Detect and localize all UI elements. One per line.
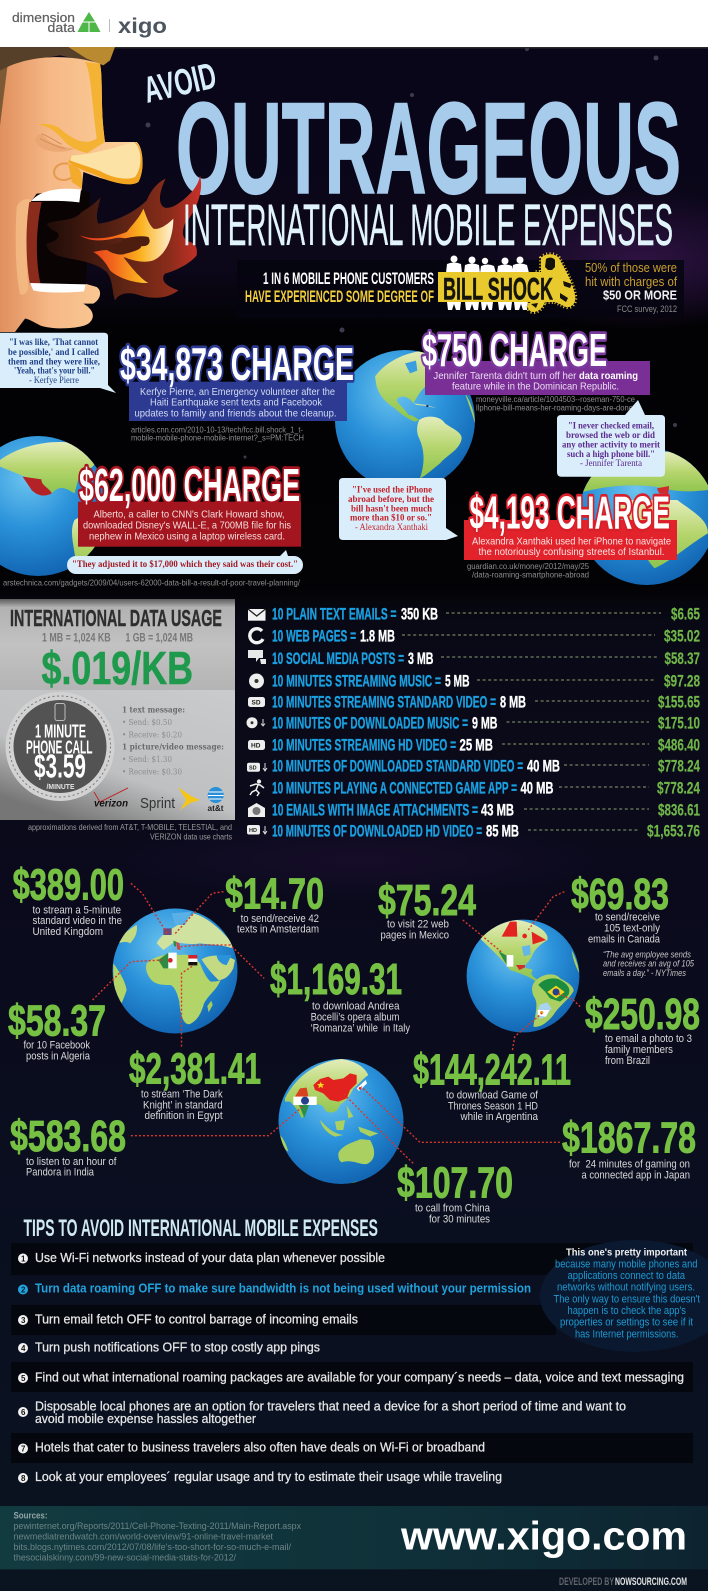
callout: this one's pretty important: applications connect to data bbox=[568, 1270, 686, 1282]
panel: bill shock statistic: HAVE EXPERIENCED SOME DEGREE OF bbox=[245, 287, 434, 306]
globe: Europe and Africa with flags bbox=[112, 908, 238, 1034]
panel: international data usage bbox=[0, 599, 235, 820]
cost: Egypt bbox=[129, 1044, 261, 1122]
cost: Argentina: to download Game of bbox=[446, 1089, 539, 1101]
cost: Canada: to send/receive bbox=[595, 912, 660, 924]
NYTimes quote: “The avg employee sends bbox=[603, 949, 691, 959]
text and picture message prices bbox=[122, 706, 224, 777]
cost: India: $583.68 bbox=[10, 1112, 126, 1161]
panel: $34,873 charge: mobile-mobile-phone-mobile-internet?_s=PM:TECH bbox=[131, 434, 304, 443]
tip 5: 5 bbox=[21, 1374, 26, 1383]
sources: newmediatrendwatch.com/world-overview/91-online-travel-market bbox=[14, 1531, 273, 1541]
panel: $62,000 charge: Alberto, a caller to CNN's Clark Howard show, bbox=[94, 508, 284, 520]
cost: India bbox=[10, 1112, 126, 1179]
approximations note: VERIZON data use charts bbox=[150, 831, 232, 841]
cost: India: Pandora in India bbox=[26, 1167, 95, 1179]
cost: Amsterdam: $14.70 bbox=[225, 869, 324, 918]
cost: China: for 30 minutes bbox=[429, 1213, 490, 1225]
phone call price badge: /MINUTE bbox=[46, 784, 75, 791]
panel: $750 charge bbox=[422, 324, 665, 477]
panel: tips bbox=[11, 1215, 693, 1484]
callout: Jennifer Tarenta quote bbox=[557, 400, 665, 477]
globe: Asia with flags bbox=[278, 1059, 404, 1189]
callout: Kerfye Pierre quote: "I was like, 'That cannot bbox=[9, 337, 99, 347]
callout: this one's pretty important bbox=[540, 1240, 708, 1352]
row: web pages bbox=[250, 627, 700, 646]
callout: this one's pretty important: happen is to check the app's bbox=[568, 1305, 686, 1317]
row: social media posts: 3 MB bbox=[408, 649, 434, 668]
carrier logos bbox=[94, 787, 224, 813]
callout: Jennifer Tarenta quote: browsed the web or did bbox=[566, 430, 655, 440]
cost: United Kingdom: United Kingdom bbox=[32, 926, 103, 938]
carrier logos: verizon bbox=[94, 799, 128, 810]
callout: Kerfye Pierre quote: 'Yeah, that's your bill." bbox=[14, 366, 95, 376]
row: downloaded HD video: HD bbox=[249, 828, 257, 834]
title lines: avoid and international mobile expenses bbox=[140, 55, 673, 258]
NYTimes quote: emails a day.” - NYTimes bbox=[603, 968, 686, 978]
row: downloaded music: 10 MINUTES OF DOWNLOADED MUSIC = bbox=[272, 713, 468, 732]
cost: United Kingdom: $389.00 bbox=[13, 860, 124, 909]
callout: Alexandra Xanthaki quote bbox=[339, 478, 458, 540]
cost: Algeria: posts in Algeria bbox=[26, 1051, 91, 1063]
cost: Amsterdam: to send/receive 42 bbox=[241, 913, 319, 925]
text and picture message prices: • Send: $1.30 bbox=[122, 755, 172, 765]
globe: North America, left bbox=[0, 436, 108, 576]
cost: Japan: a connected app in Japan bbox=[582, 1169, 690, 1181]
panel: $62,000 charge: arstechnica.com/gadgets/2009/04/users-62000-data-bill-a-result-of-poor-travel-planning/ bbox=[3, 578, 301, 588]
tip 2: 2 bbox=[21, 1286, 26, 1294]
row: downloaded standard video: 40 MB bbox=[527, 756, 560, 775]
cost: Argentina: $144,242.11 bbox=[413, 1045, 571, 1094]
text and picture message prices: 1 text message: bbox=[122, 706, 185, 716]
row: streaming HD video: 25 MB bbox=[460, 736, 493, 755]
cost: Mexico: pages in Mexico bbox=[380, 929, 449, 941]
NYTimes quote: and receives an avg of 105 bbox=[603, 959, 695, 969]
row: plain text emails: 10 PLAIN TEXT EMAILS = bbox=[272, 604, 397, 623]
panel: international data usage: 1 GB = 1,024 MB bbox=[126, 633, 193, 645]
panel: $750 charge: Jennifer Tarenta didn't turn off her bbox=[433, 370, 577, 382]
cost: Mexico: to visit 22 web bbox=[387, 919, 449, 931]
cost: Canada: 105 text-only bbox=[604, 923, 660, 935]
carrier logos: Sprint bbox=[140, 796, 175, 812]
globe: Europe and Africa, right bbox=[578, 448, 708, 585]
callout: Jennifer Tarenta quote: such a high phone bill." bbox=[567, 449, 655, 459]
panel: $34,873 charge: $34,873 CHARGE bbox=[120, 338, 354, 390]
panel: international data usage: $.019/KB bbox=[42, 642, 193, 694]
tip 3: Turn email fetch OFF to control barrage of incoming emails bbox=[35, 1312, 358, 1326]
tip 3: 3 bbox=[21, 1316, 26, 1325]
row: streaming HD video: 10 MINUTES STREAMING HD VIDEO = bbox=[272, 736, 456, 755]
row: web pages: 10 WEB PAGES = bbox=[272, 627, 356, 646]
cost: Egypt: Knight’ in standard bbox=[143, 1099, 223, 1111]
cost: United Kingdom: standard video in the bbox=[32, 915, 122, 927]
tip 1: Use Wi-Fi networks instead of your data plan whenever possible bbox=[35, 1251, 385, 1265]
tip 7: Hotels that cater to business travelers also often have deals on Wi-Fi or broadband bbox=[35, 1441, 485, 1455]
phone call price badge bbox=[6, 692, 114, 801]
callout: Kerfye Pierre quote: them and they were like, bbox=[8, 356, 100, 366]
row: streaming HD video: HD bbox=[251, 742, 261, 750]
panel: international data usage: 1 MB = 1,024 KB bbox=[42, 633, 111, 645]
tip 2: Turn data roaming OFF to make sure bandwidth is not being used without your permission bbox=[35, 1282, 531, 1296]
panel: bill shock statistic: 1 IN 6 MOBILE PHONE CUSTOMERS bbox=[263, 269, 434, 288]
tip 7: 7 bbox=[21, 1444, 26, 1454]
website address: www.xigo.com bbox=[400, 1514, 687, 1558]
cost: Algeria bbox=[8, 997, 106, 1063]
cost: Japan: for 24 minutes of gaming on bbox=[569, 1158, 690, 1170]
phone call price badge: $3.59 bbox=[34, 748, 86, 785]
panel: $750 charge: moneyville.ca/article/1004503--roseman-750-ce bbox=[476, 395, 636, 404]
cost: Amsterdam bbox=[225, 869, 324, 936]
panel: $4,193 charge: guardian.co.uk/money/2012/may/25 bbox=[467, 562, 590, 571]
cost: Italy: Bocelli’s opera album bbox=[311, 1011, 400, 1023]
text and picture message prices: 1 picture/video message: bbox=[122, 742, 224, 752]
icon: crowd silhouettes bbox=[446, 256, 529, 310]
cost: Brazil: family members bbox=[605, 1044, 673, 1056]
tip 6: 6 bbox=[21, 1408, 26, 1417]
panel: $34,873 charge bbox=[0, 333, 354, 443]
row: streaming standard video: 8 MB bbox=[500, 692, 526, 711]
panel: $62,000 charge bbox=[3, 459, 303, 588]
cost: Brazil bbox=[585, 990, 700, 1067]
panel: $750 charge: feature while in the Dominican Republic. bbox=[452, 381, 619, 393]
cost: Mexico bbox=[378, 876, 476, 941]
panel: bill shock statistic: BILL SHOCK bbox=[443, 270, 553, 306]
phone call price badge: 1 MINUTE bbox=[35, 722, 86, 742]
tip 4: 4 bbox=[21, 1344, 26, 1353]
callout: adjusted bill quote bbox=[67, 550, 303, 574]
panel: $34,873 charge: updates to family and friends about the cleanup. bbox=[134, 407, 336, 419]
row: streaming music: 10 MINUTES STREAMING MUSIC = bbox=[272, 671, 441, 690]
red dotted connector lines bbox=[93, 883, 580, 1163]
phone call price badge: PHONE CALL bbox=[26, 737, 93, 757]
approximations note bbox=[28, 822, 232, 841]
cost: Argentina bbox=[413, 1045, 571, 1123]
row: plain text emails bbox=[248, 604, 700, 623]
callout: this one's pretty important: has Internet permissions. bbox=[575, 1328, 678, 1340]
callout: adjusted bill quote: "They adjusted it to $17,000 which they said was their cost." bbox=[72, 559, 298, 570]
credit: DEVELOPED BY bbox=[559, 1576, 614, 1588]
panel: $62,000 charge: $62,000 CHARGE bbox=[79, 459, 300, 511]
row: downloaded standard video: 10 MINUTES OF DOWNLOADED STANDARD VIDEO = bbox=[272, 756, 523, 775]
callout: this one's pretty important: This one's pretty important bbox=[566, 1247, 687, 1259]
tip 1: 1 bbox=[21, 1254, 26, 1264]
callout: Alexandra Xanthaki quote: "I've used the iPhone bbox=[352, 484, 432, 494]
panel: $750 charge: llphone-bill-means-her-roaming-days-are-done bbox=[476, 404, 634, 413]
panel: bill shock statistic: hit with charges of bbox=[585, 275, 677, 289]
icon: shocked monster bbox=[528, 254, 575, 312]
sources: Sources: bbox=[14, 1510, 48, 1521]
row: social media posts: 10 SOCIAL MEDIA POSTS = bbox=[272, 649, 404, 668]
row: streaming HD video bbox=[248, 736, 700, 755]
cost: United Kingdom: to stream a 5-minute bbox=[32, 904, 121, 916]
callout: Kerfye Pierre quote: - Kerfye Pierre bbox=[29, 375, 79, 385]
row: web pages: 1.8 MB bbox=[360, 627, 395, 646]
callout: Jennifer Tarenta quote: "I never checked email, bbox=[568, 420, 654, 430]
title lines: avoid and international mobile expenses: AVOID bbox=[140, 55, 220, 111]
cost: Egypt: $2,381.41 bbox=[129, 1044, 261, 1093]
row: plain text emails: 350 KB bbox=[401, 604, 438, 623]
header logos bbox=[0, 0, 708, 48]
panel: bill shock statistic: FCC survey, 2012 bbox=[617, 304, 677, 314]
cost: Argentina: Thrones Season 1 HD bbox=[448, 1100, 538, 1112]
cost: Japan bbox=[562, 1114, 696, 1181]
panel: international data usage: INTERNATIONAL DATA USAGE bbox=[10, 605, 222, 631]
callout: Alexandra Xanthaki quote: abroad before, but the bbox=[348, 494, 434, 504]
cost: Algeria: for 10 Facebook bbox=[24, 1040, 90, 1052]
panel: $4,193 charge: Alexandra Xanthaki used her iPhone to navigate bbox=[472, 535, 671, 547]
row: downloaded HD video: 10 MINUTES OF DOWNLOADED HD VIDEO = bbox=[272, 822, 482, 841]
row: streaming standard video: SD bbox=[252, 700, 261, 706]
row: social media posts bbox=[248, 649, 700, 668]
text and picture message prices: • Send: $0.50 bbox=[122, 718, 172, 728]
cost: China bbox=[397, 1159, 513, 1225]
tip 8: 8 bbox=[21, 1474, 26, 1483]
cost: Canada bbox=[571, 870, 669, 945]
cost: Amsterdam: texts in Amsterdam bbox=[237, 924, 319, 936]
sources: pewinternet.org/Reports/2011/Cell-Phone-Texting-2011/Main-Report.aspx bbox=[14, 1521, 301, 1531]
text and picture message prices: • Receive: $0.30 bbox=[122, 767, 182, 777]
tips heading: TIPS TO AVOID INTERNATIONAL MOBILE EXPENSES bbox=[24, 1215, 378, 1242]
row: streaming music: 5 MB bbox=[445, 671, 470, 690]
header logos: dimension bbox=[12, 11, 75, 25]
sources: thesocialskinny.com/99-new-social-media-stats-for-2012/ bbox=[14, 1552, 236, 1562]
row: connected game app: 10 MINUTES PLAYING A CONNECTED GAME APP = bbox=[272, 778, 517, 797]
tip 6: avoid mobile expense hassles altogether bbox=[35, 1412, 256, 1426]
callout: Kerfye Pierre quote bbox=[0, 333, 116, 393]
panel: $34,873 charge: articles.cnn.com/2010-10-13/tech/fcc.bill.shock_1_t- bbox=[131, 426, 303, 435]
panel: $34,873 charge: Kerfye Pierre, an Emergency volunteer after the bbox=[140, 386, 335, 398]
cost: Mexico: $75.24 bbox=[378, 876, 476, 925]
row: downloaded standard video: SD bbox=[249, 766, 257, 772]
callout: Alexandra Xanthaki quote: more than $10 or so." bbox=[350, 513, 432, 523]
header logos: data bbox=[48, 21, 75, 35]
credit bbox=[559, 1576, 687, 1588]
cost: United Kingdom bbox=[13, 860, 124, 938]
tip 6: Disposable local phones are an option for travelers that need a device for a short period of time and want to bbox=[35, 1400, 626, 1414]
tip 4: Turn push notifications OFF to stop costly app pings bbox=[35, 1341, 320, 1355]
NYTimes quote bbox=[603, 949, 695, 978]
cost: Italy: ‘Romanza’ while in Italy bbox=[311, 1022, 410, 1034]
panel: $4,193 charge: the notoriously confusing streets of Istanbul. bbox=[478, 546, 664, 558]
callout: Jennifer Tarenta quote: any other activity to merit bbox=[562, 440, 661, 450]
panel: $750 charge: data roaming bbox=[579, 370, 638, 382]
callout: Jennifer Tarenta quote: - Jennifer Tarenta bbox=[580, 458, 642, 468]
callout: Kerfye Pierre quote: be possible,' and I called bbox=[8, 347, 99, 357]
panel: bill shock statistic: $50 OR MORE bbox=[603, 288, 677, 302]
row: downloaded music: 9 MB bbox=[472, 713, 498, 732]
sources bbox=[14, 1510, 301, 1562]
country costs bbox=[8, 860, 700, 1225]
sources: bits.blogs.nytimes.com/2012/07/08/life's-too-short-for-so-much-e-mail/ bbox=[14, 1542, 291, 1552]
row: connected game app: 40 MB bbox=[520, 778, 554, 797]
text and picture message prices: • Receive: $0.20 bbox=[122, 730, 182, 740]
cost: Algeria: $58.37 bbox=[8, 997, 106, 1046]
panel: bill shock statistic bbox=[237, 254, 684, 318]
panel: $4,193 charge bbox=[339, 478, 677, 580]
cost: Brazil: from Brazil bbox=[605, 1055, 650, 1067]
carrier logos: at&t bbox=[208, 804, 224, 813]
panel: $34,873 charge: Haiti Earthquake sent texts and Facebook bbox=[150, 397, 323, 409]
panel: $62,000 charge: nephew in Mexico using a laptop wireless card. bbox=[89, 530, 285, 542]
cost: Egypt: to stream ‘The Dark bbox=[141, 1088, 223, 1100]
approximations note: approximations derived from AT&T, T-MOBILE, TELESTIAL, and bbox=[28, 822, 232, 832]
tip 6 bbox=[18, 1400, 626, 1426]
tip 8: Look at your employees´ regular usage and try to estimate their usage while traveling bbox=[35, 1470, 502, 1484]
globe: Americas, center bbox=[335, 350, 475, 490]
cost: Italy: to download Andrea bbox=[312, 1000, 400, 1012]
illustration: shouting face breathing fire bbox=[0, 47, 201, 332]
cost: Brazil: to email a photo to 3 bbox=[605, 1033, 692, 1045]
cost: Canada: $69.83 bbox=[571, 870, 669, 919]
cost: India: to listen to an hour of bbox=[26, 1156, 117, 1168]
row: streaming music bbox=[249, 671, 700, 690]
panel: $4,193 charge: /data-roaming-smartphone-abroad bbox=[472, 571, 589, 580]
cost: Egypt: definition in Egypt bbox=[144, 1110, 223, 1122]
row: streaming standard video: 10 MINUTES STREAMING STANDARD VIDEO = bbox=[272, 692, 496, 711]
footer band bbox=[0, 1506, 708, 1569]
globe: the Americas with flags bbox=[467, 920, 579, 1032]
cost: Italy: $1,169.31 bbox=[270, 955, 402, 1004]
callout: Alexandra Xanthaki quote: - Alexandra Xanthaki bbox=[355, 522, 428, 532]
panel: bill shock statistic: 50% of those were bbox=[585, 261, 677, 275]
row: emails with image attachments: 43 MB bbox=[481, 801, 514, 820]
cost: China: to call from China bbox=[415, 1203, 491, 1215]
tip 5: Find out what international roaming packages are available for your company´s needs – data, voice and text messaging bbox=[35, 1370, 684, 1384]
row: downloaded HD video: 85 MB bbox=[486, 822, 519, 841]
cost: Canada: emails in Canada bbox=[588, 933, 661, 945]
header logos: xigo bbox=[118, 15, 167, 38]
callout: Alexandra Xanthaki quote: bill hasn't been much bbox=[351, 503, 432, 513]
row: emails with image attachments: 10 EMAILS WITH IMAGE ATTACHMENTS = bbox=[272, 801, 478, 820]
chart: data use cost list bbox=[246, 604, 700, 841]
cost: China: $107.70 bbox=[397, 1159, 513, 1208]
panel: $62,000 charge: downloaded Disney's WALL-E, a 700MB file for his bbox=[83, 519, 291, 531]
cost: Argentina: while in Argentina bbox=[460, 1111, 539, 1123]
cost: Italy bbox=[270, 955, 410, 1034]
